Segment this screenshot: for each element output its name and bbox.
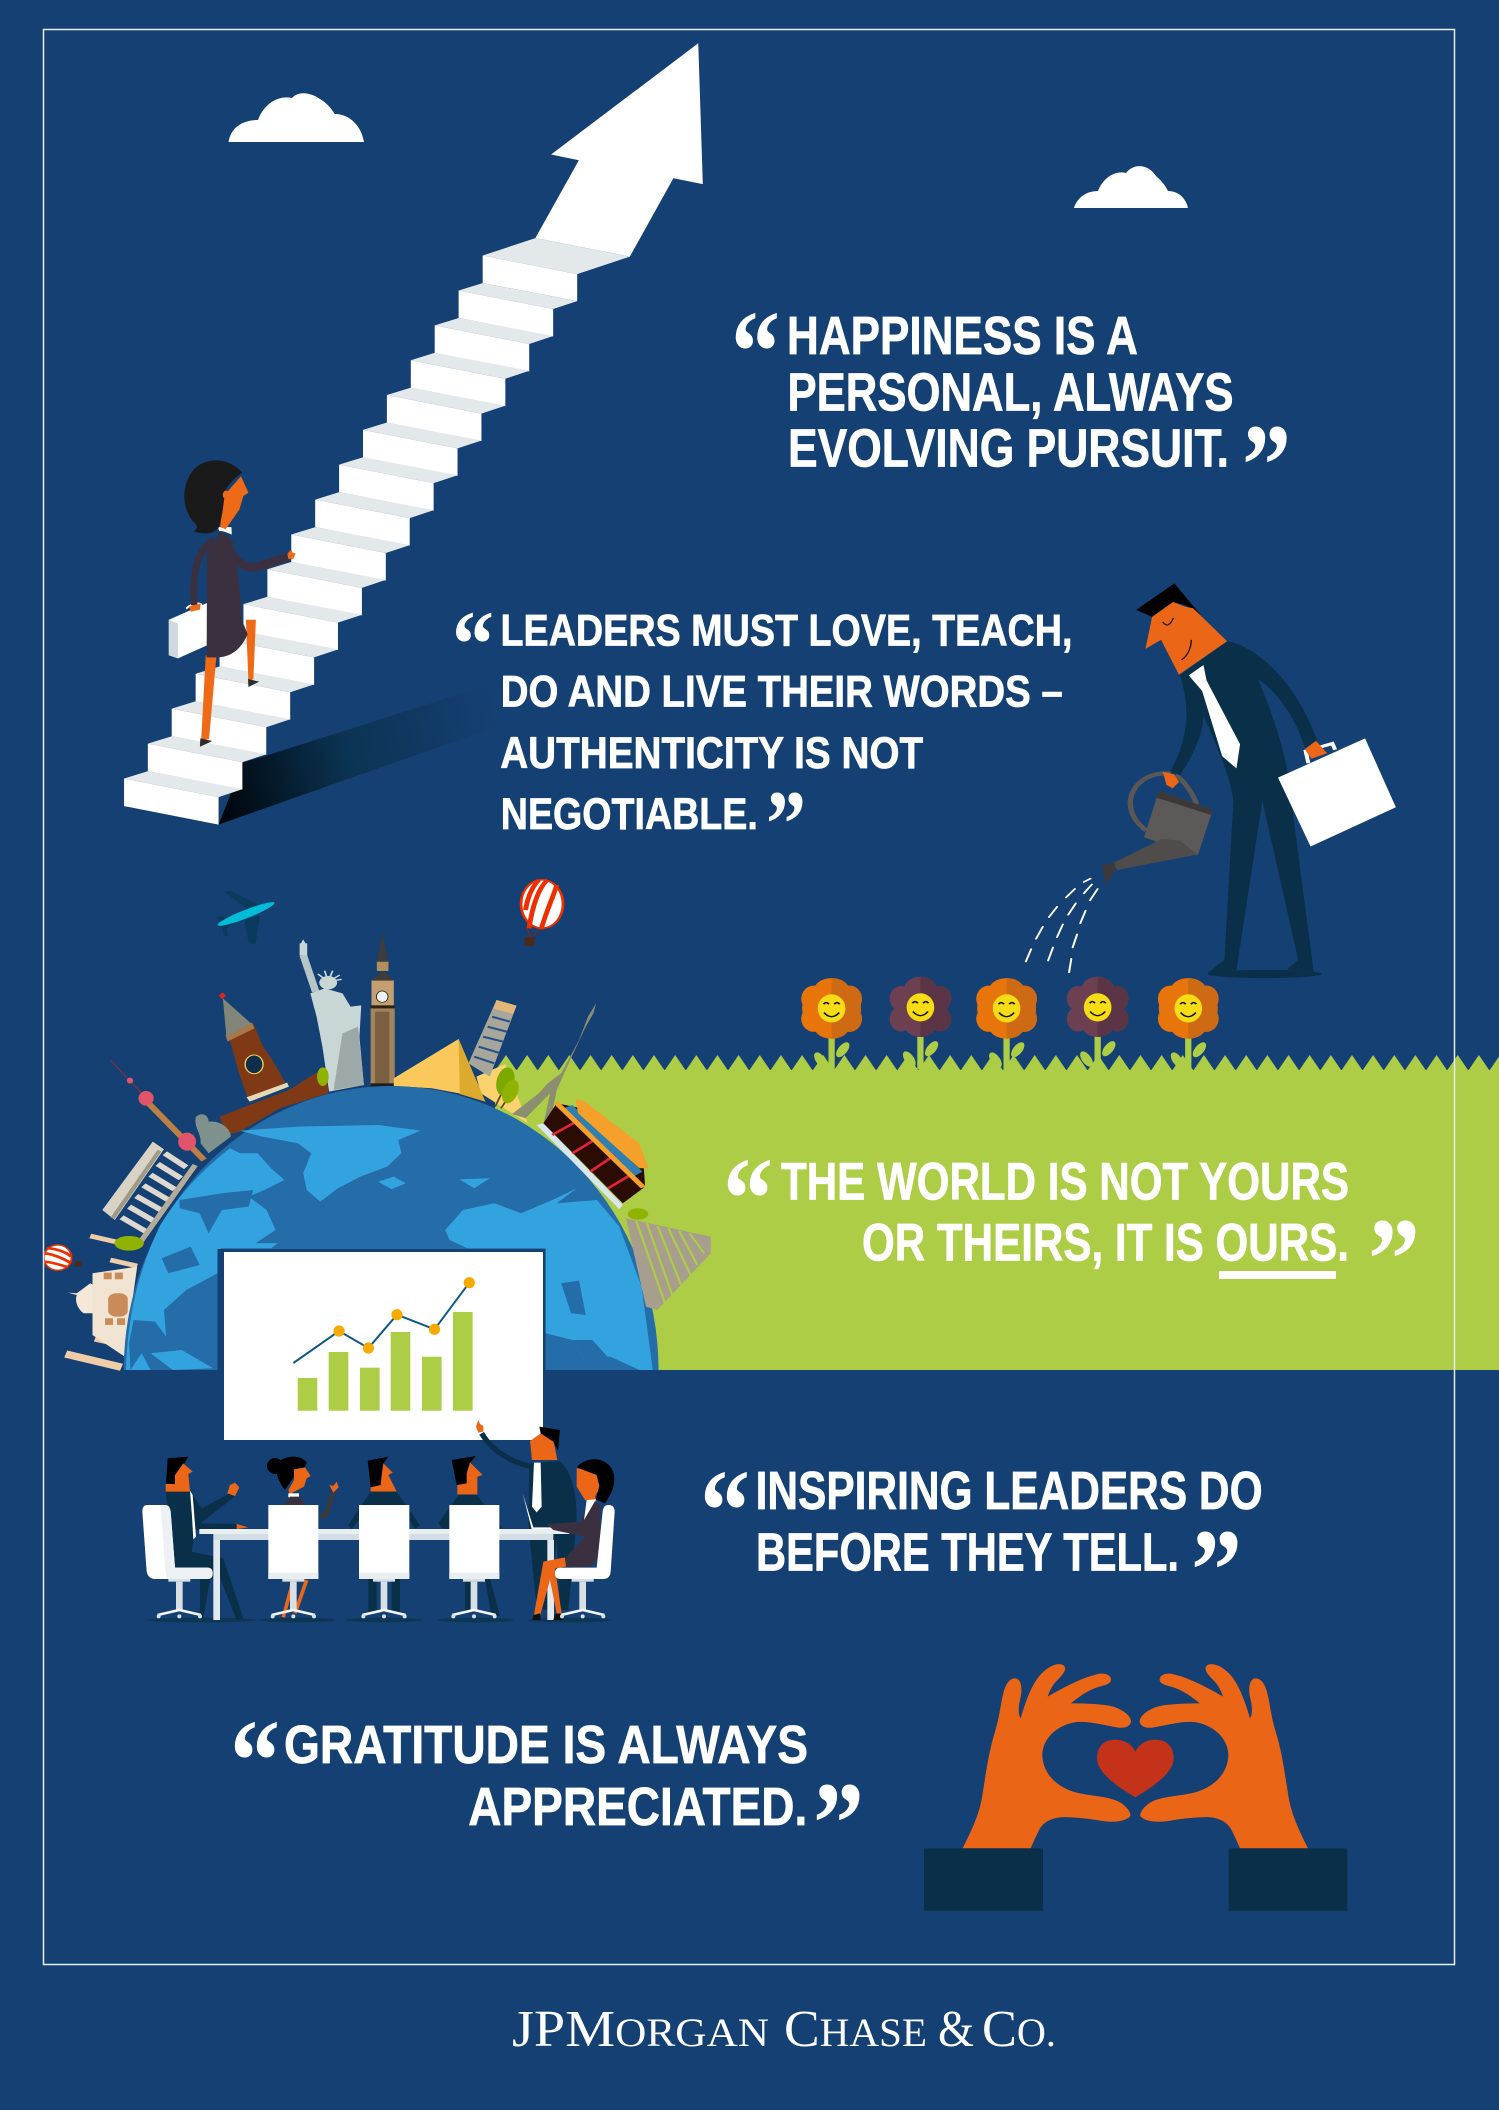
quote: happiness	[731, 286, 1291, 531]
flower 5	[1158, 978, 1219, 1070]
man suit	[1170, 641, 1322, 978]
quote: happiness: “	[731, 286, 780, 417]
man hair	[1136, 583, 1203, 618]
taj mahal	[66, 1236, 144, 1367]
heart	[1097, 1740, 1174, 1797]
man fourth	[438, 1456, 503, 1617]
left hand	[963, 1664, 1131, 1848]
right cuff	[1229, 1848, 1347, 1911]
left chair base	[157, 1579, 202, 1618]
quote: leaders: ”	[766, 771, 806, 877]
water drops	[1026, 879, 1098, 972]
green grass band	[495, 1055, 1499, 1370]
globe	[124, 1086, 659, 1370]
watering can	[1102, 772, 1213, 885]
quote: gratitude: “	[230, 1695, 280, 1826]
floor shadows	[147, 1618, 613, 1622]
underline	[1219, 1271, 1336, 1279]
cloud right	[1074, 166, 1188, 208]
presentation board with chart	[218, 1249, 546, 1440]
quote: leaders: “	[452, 591, 494, 697]
JPMorgan Chase logo: &	[938, 2001, 974, 2058]
steps	[124, 238, 630, 825]
quote: happiness: ”	[1242, 400, 1291, 531]
globe with world landmarks	[43, 879, 711, 1370]
quote: gratitude	[230, 1695, 864, 1889]
quote: happiness: EVOLVING PURSUIT.	[788, 418, 1229, 478]
staircase with arrow and shadow	[124, 43, 703, 825]
hands forming heart	[924, 1664, 1347, 1911]
front chair 1	[268, 1505, 318, 1618]
kremlin tower	[219, 992, 329, 1135]
quote: happiness: HAPPINESS IS A	[787, 306, 1138, 366]
quote: the world: ”	[1368, 1194, 1420, 1325]
woman second	[267, 1457, 339, 1617]
quote: leaders: LEADERS MUST LOVE, TEACH,	[500, 606, 1072, 655]
statue of liberty	[300, 939, 364, 1092]
flower row	[801, 977, 1219, 1070]
man face	[1145, 602, 1227, 675]
flower 2	[890, 977, 951, 1069]
chinese temple	[537, 1099, 648, 1209]
quote: gratitude: APPRECIATED.	[468, 1777, 807, 1837]
quote: inspiring leaders: “	[700, 1445, 750, 1576]
leaning tower of pisa	[468, 1000, 517, 1077]
quote: the world	[723, 1133, 1420, 1325]
quote: inspiring leaders	[700, 1445, 1263, 1636]
JPMorgan Chase logo	[512, 2001, 1056, 2058]
quote: gratitude: ”	[813, 1758, 864, 1889]
quote: leaders: NEGOTIABLE.	[501, 790, 758, 839]
quote: inspiring leaders: ”	[1191, 1505, 1242, 1636]
left man	[142, 1457, 248, 1620]
airplane	[215, 891, 277, 944]
big ben	[371, 933, 395, 1087]
dark seas	[162, 1190, 610, 1360]
buddha statue	[195, 1114, 231, 1153]
front chair 3	[449, 1505, 499, 1618]
hot air balloon	[520, 879, 564, 946]
right hand	[1140, 1664, 1308, 1848]
continents	[126, 1125, 653, 1370]
small balloon	[43, 1244, 82, 1271]
quote: inspiring leaders: INSPIRING LEADERS DO	[756, 1461, 1263, 1521]
white arrow	[535, 43, 703, 257]
quote: inspiring leaders: BEFORE THEY TELL.	[756, 1522, 1179, 1582]
pearl tower	[110, 1060, 204, 1160]
standing presenter	[476, 1420, 577, 1610]
front chair 2	[359, 1505, 409, 1618]
quote: leaders: DO AND LIVE THEIR WORDS –	[501, 667, 1063, 716]
conference table	[199, 1529, 569, 1620]
JPMorgan Chase logo: JPMORGAN	[512, 2001, 769, 2058]
greek temple	[102, 1142, 195, 1242]
JPMorgan Chase logo: CO.	[982, 2001, 1056, 2058]
stair shadow	[219, 684, 504, 825]
quote: leaders: AUTHENTICITY IS NOT	[500, 729, 923, 778]
left cuff	[924, 1848, 1043, 1911]
right woman with laptop	[523, 1459, 615, 1620]
flower 1	[801, 978, 862, 1070]
flower 3	[976, 978, 1037, 1070]
pyramids	[394, 1039, 528, 1123]
quote: the world: “	[723, 1133, 773, 1264]
flower 4	[1067, 977, 1128, 1069]
quote: the world: THE WORLD IS NOT YOURS	[781, 1153, 1349, 1212]
JPMorgan Chase logo: CHASE	[784, 2001, 927, 2058]
cloud left	[228, 93, 364, 142]
tie	[1189, 665, 1240, 768]
quote: gratitude: GRATITUDE IS ALWAYS	[284, 1715, 808, 1775]
man watering flowers with can and briefcase	[801, 583, 1396, 1070]
trees	[494, 1067, 522, 1108]
line chart	[293, 1277, 475, 1363]
eiffel tower	[512, 1003, 596, 1125]
briefcase	[1278, 738, 1396, 847]
bar chart	[298, 1312, 473, 1411]
meeting scene	[142, 1420, 615, 1622]
woman climbing stairs	[169, 460, 296, 747]
quote: leaders	[452, 591, 1072, 877]
man third	[348, 1457, 420, 1612]
quote: happiness: PERSONAL, ALWAYS	[788, 362, 1234, 422]
stepped pyramid	[626, 1208, 711, 1310]
right chair base	[560, 1579, 605, 1618]
quote: the world: OR THEIRS, IT IS OURS.	[862, 1213, 1349, 1272]
